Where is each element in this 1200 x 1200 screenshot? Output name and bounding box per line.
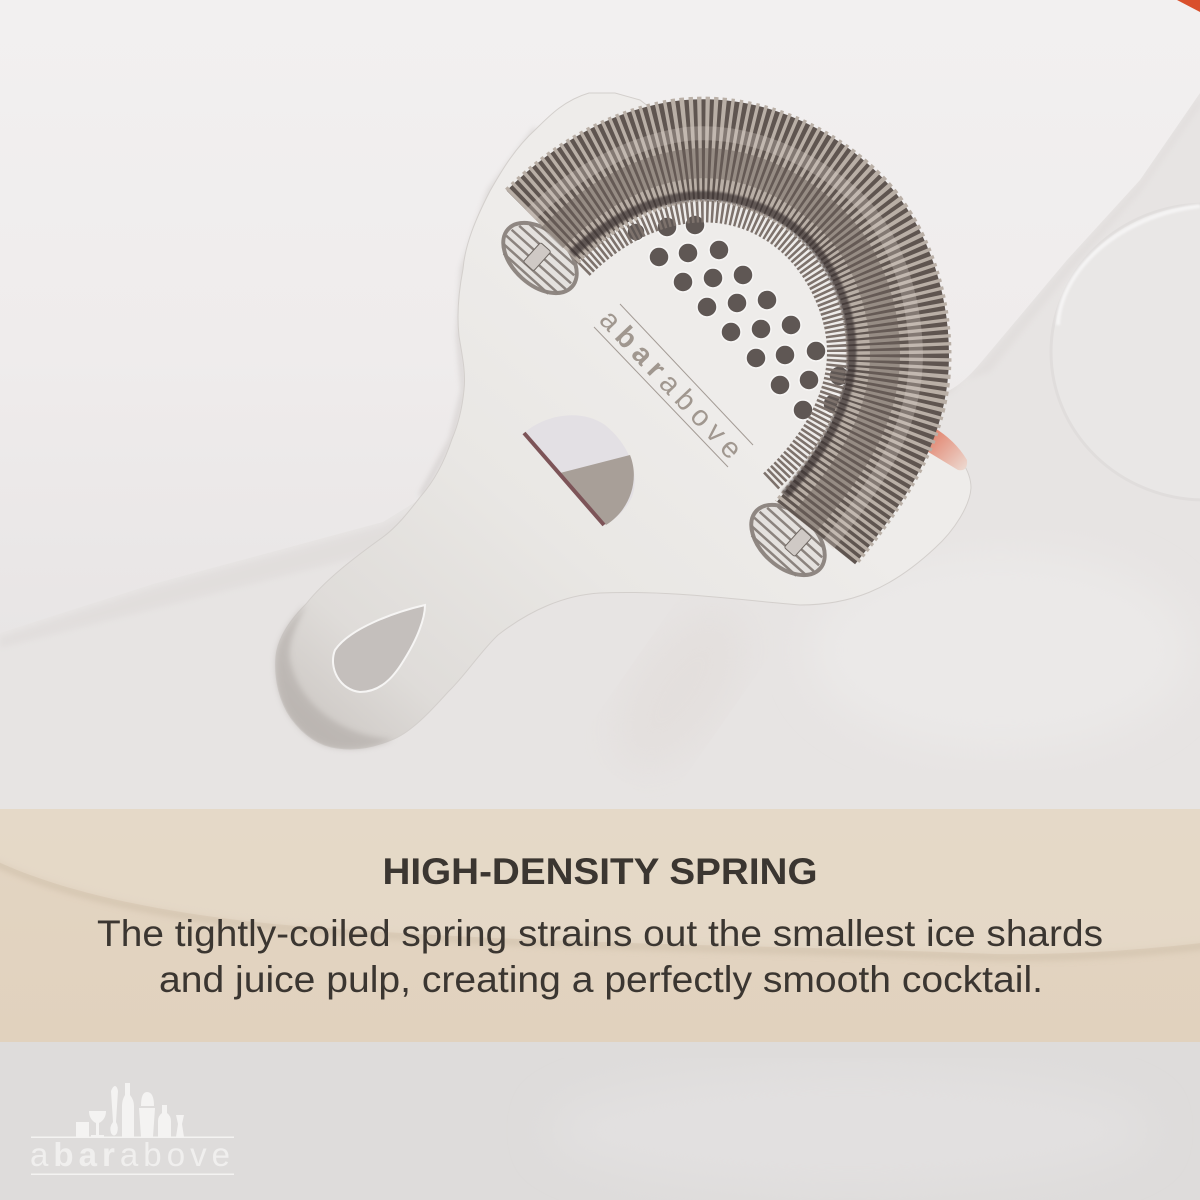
engraved logo: abarabove (593, 304, 748, 466)
copper reflection (925, 427, 967, 470)
heading: HIGH-DENSITY SPRING (382, 851, 818, 892)
lower marble strip (0, 1042, 1200, 1200)
spring shade ridge (572, 195, 852, 495)
spring coil stripes (542, 149, 899, 533)
teardrop hole (333, 605, 425, 692)
strainer shadow (421, 129, 536, 496)
band arc shading (0, 863, 1200, 960)
spring dark core (542, 149, 899, 533)
brand logo (30, 1083, 234, 1175)
strainer body (276, 93, 971, 749)
strainer (276, 93, 971, 749)
glass base (1051, 204, 1200, 500)
logo wordmark: abarabove (30, 1136, 230, 1173)
upper spring end (490, 209, 590, 307)
red object corner (1177, 0, 1200, 12)
logo bottom rule (31, 1174, 234, 1175)
spring mid tone (552, 163, 885, 522)
logo top rule (31, 1136, 234, 1138)
white linen cloth (0, 0, 1200, 648)
body line 2: and juice pulp, creating a perfectly smooth cocktail. (159, 959, 1043, 1000)
lower spring end (738, 491, 838, 589)
bottle opener slot (524, 415, 635, 525)
bar tools silhouettes (76, 1083, 184, 1137)
handle tip sheen (276, 604, 394, 749)
spring outer tone (530, 133, 916, 545)
strainer holes (627, 215, 849, 420)
spring inner coils (582, 211, 838, 482)
coiled spring (530, 133, 916, 545)
body line 1: The tightly-coiled spring strains out the smallest ice shards (97, 913, 1103, 954)
text band (0, 809, 1200, 1042)
